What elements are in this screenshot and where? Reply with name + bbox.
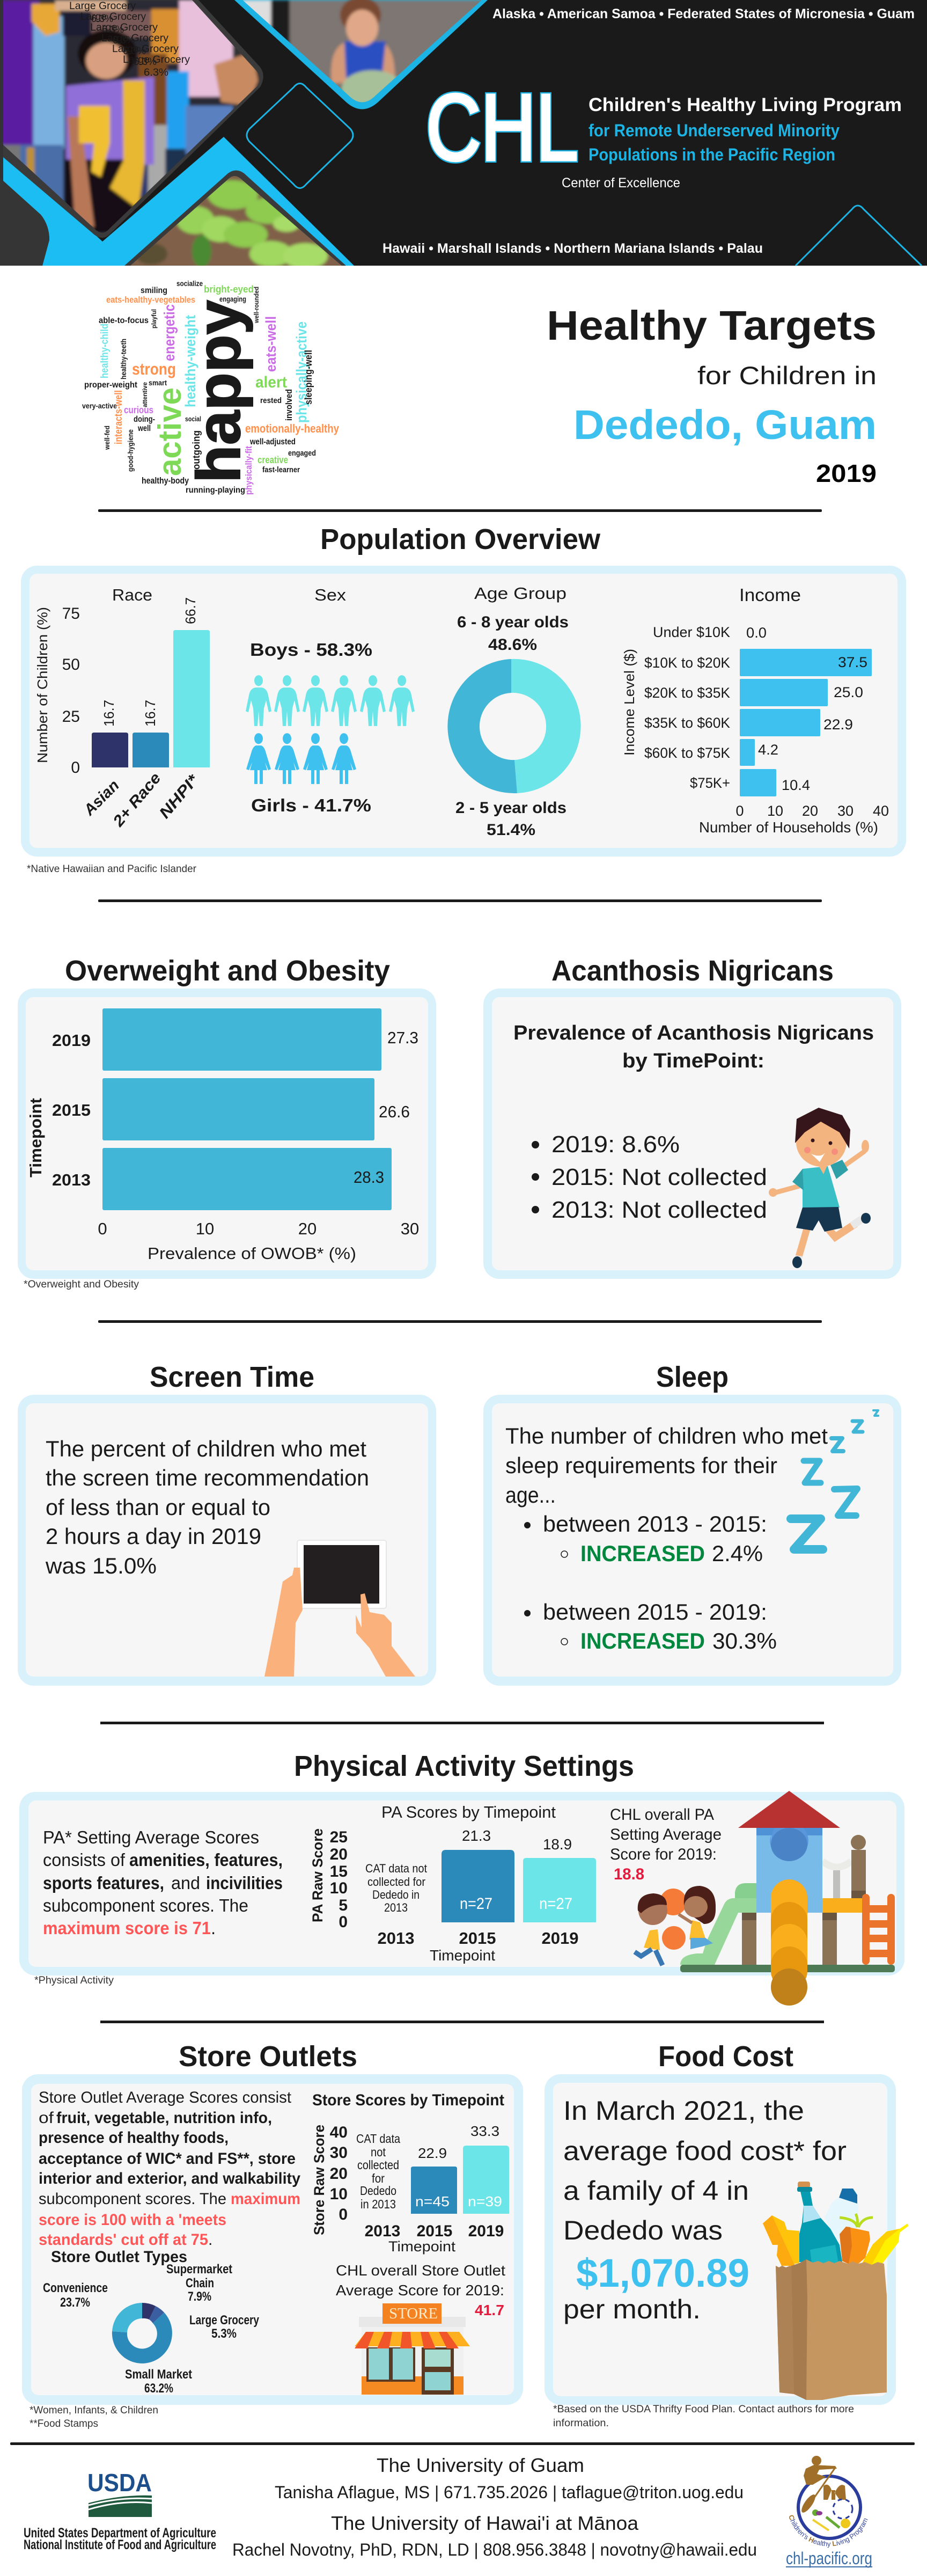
body text: Dededo was (563, 2215, 723, 2245)
chart: age group donut: 6 - 8 year olds (457, 613, 569, 631)
word cloud: active (152, 387, 188, 476)
chart: income: $75K+ (690, 775, 730, 791)
jurisdictions bottom: Hawaii • Marshall Islands • Northern Mariana Islands • Palau (382, 241, 763, 256)
chart: store scores by timepoint: Store Scores by Timepoint (312, 2091, 504, 2109)
word cloud: able-to-focus (99, 316, 149, 325)
chart: age group donut: 48.6% (488, 636, 537, 654)
chart: PA scores by timepoint: 21.3 (462, 1827, 491, 1844)
chart: income: 20 (802, 803, 818, 819)
CHL logo letters: CHL (426, 75, 578, 180)
chart: race: 50 (62, 656, 80, 674)
panel: population overview (21, 566, 906, 857)
overall PA score callout: Score for 2019: (610, 1846, 717, 1863)
icon: children with basketballs (635, 1886, 716, 1965)
body text: score is 100 with a 'meets (39, 2211, 226, 2229)
panel heading (513, 1022, 874, 1072)
word cloud: sleeping-well (303, 350, 314, 405)
word cloud: engaged (288, 449, 316, 458)
body text: and (171, 1873, 200, 1893)
chart: income: $60K to $75K (644, 745, 730, 761)
chart: race: Number of Children (%) (34, 607, 50, 763)
body text: maximum score is 71 (43, 1918, 211, 1938)
word cloud: happy (185, 300, 253, 483)
panel: overweight chart: 26.6 (379, 1102, 410, 1121)
word cloud: well-adjusted (249, 437, 296, 447)
panel: overweight chart: Timepoint (26, 1098, 45, 1177)
chart: income: 30 (837, 803, 854, 819)
body text: between 2015 - 2019: (543, 1599, 767, 1624)
chart: income: 25.0 (834, 684, 863, 700)
word cloud: well-fed (103, 426, 111, 450)
chart: age group donut: 2 - 5 year olds (455, 799, 566, 817)
icon: sleeping Z marks (791, 1410, 878, 1549)
chart: store scores by timepoint: not (371, 2145, 386, 2159)
contacts: Rachel Novotny, PhD, RDN, LD | 808.956.3848 | novotny@hawaii.edu (232, 2540, 757, 2559)
icon: tablet in hands (264, 1540, 415, 1677)
word cloud: doing- (134, 415, 155, 424)
heading: Screen Time: Screen Time (150, 1361, 314, 1393)
photo: children with leis (0, 0, 263, 241)
word cloud: eats-healthy-vegetables (106, 295, 195, 305)
chart: store outlet types donut (43, 2248, 260, 2396)
panel: overweight chart: 2015 (52, 1101, 91, 1119)
chart: store outlet types donut: Supermarket (166, 2262, 232, 2277)
body text: PA* Setting Average Scores (43, 1827, 259, 1847)
bullet list: 2013: Not collected (551, 1197, 767, 1223)
program subtitle (588, 121, 840, 164)
footnote: information. (553, 2418, 609, 2429)
stray chart labels: 6.3% (102, 24, 124, 35)
stray chart labels: Large Grocery (80, 11, 146, 23)
panel: overweight chart (18, 989, 436, 1279)
chart: PA scores by timepoint: PA Scores by Timepoint (381, 1803, 556, 1821)
chart: PA scores by timepoint: n=27 (539, 1895, 572, 1913)
word cloud (82, 279, 340, 495)
CHL program logo: Children's Healthy Living Program (789, 2515, 868, 2548)
blue ribbon (3, 137, 354, 266)
chart: income: 40 (873, 803, 889, 819)
stray chart labels: 6.3% (134, 56, 157, 68)
panel: overweight chart: 2019 (52, 1031, 91, 1050)
panel heading: Prevalence of Acanthosis Nigricans (513, 1022, 874, 1044)
chart: store scores by timepoint: 2013 (365, 2222, 400, 2240)
title line: for Children in: for Children in (697, 361, 877, 390)
body text (563, 2096, 847, 2324)
chart: PA scores by timepoint: n=27 (460, 1895, 492, 1913)
word cloud: creative (258, 455, 288, 465)
icon: store front: STORE (389, 2306, 438, 2322)
word cloud: well-rounded (253, 287, 260, 324)
word cloud: strong (132, 360, 176, 378)
chart: store scores by timepoint: Store Raw Score (311, 2125, 327, 2235)
body text: acceptance of WIC* and FS**, store (39, 2150, 296, 2168)
body text: In March 2021, the (563, 2096, 804, 2126)
body text: between 2013 - 2015: (543, 1511, 767, 1536)
body text: Store Outlet Average Scores consist (39, 2089, 292, 2106)
body text: presence of healthy foods, (39, 2129, 229, 2147)
word cloud: well (137, 424, 151, 433)
chart: sex: Girls - 41.7% (251, 795, 371, 815)
footnote: *Physical Activity (34, 1975, 114, 1986)
stray chart labels: 6.3% (123, 46, 146, 57)
word cloud: running-playing (186, 486, 245, 495)
word cloud: interacts-well (113, 390, 124, 444)
chart: PA scores by timepoint: 0 (339, 1913, 348, 1931)
footnotes (30, 2405, 158, 2429)
header banner (0, 0, 927, 269)
panel: acanthosis nigricans (483, 989, 901, 1279)
chart: income: 37.5 (838, 654, 867, 670)
stray chart labels: Large Grocery (123, 54, 190, 65)
chart: PA scores by timepoint: 2013 (378, 1929, 414, 1948)
chart: race: 66.7 (182, 597, 198, 624)
chart: race: 16.7 (101, 700, 117, 727)
chart: store scores by timepoint: 22.9 (418, 2145, 447, 2161)
grey corner shape (0, 177, 49, 266)
heading: Acanthosis Nigricans: Acanthosis Nigricans (551, 955, 834, 987)
title line: Dededo, Guam: Dededo, Guam (573, 402, 877, 448)
main title (547, 303, 877, 487)
body text: 2.4% (712, 1541, 763, 1566)
word cloud: involved (284, 389, 294, 421)
overall PA score callout: Setting Average (610, 1826, 722, 1843)
word cloud: healthy-child (99, 324, 111, 378)
chart: store scores by timepoint: Timepoint (388, 2238, 456, 2255)
panel: overweight chart: 20 (298, 1219, 317, 1238)
chart: store scores by timepoint: in 2013 (360, 2197, 396, 2211)
body text: maximum (231, 2190, 300, 2208)
word cloud: bright-eyed (204, 284, 254, 295)
heading: Overweight and Obesity: Overweight and Obesity (65, 955, 390, 987)
chart: store scores by timepoint: n=45 (415, 2193, 450, 2209)
program name: Children's Healthy Living Program (588, 94, 902, 115)
word cloud: smart (149, 378, 167, 387)
footnote: *Native Hawaiian and Pacific Islander (27, 863, 197, 875)
body text: . (208, 2231, 212, 2249)
chart: income: Under $10K (653, 624, 730, 640)
heading: Store Outlets: Store Outlets (179, 2040, 357, 2073)
chart: income: 10 (767, 803, 783, 819)
icon: boys row (246, 675, 415, 726)
chart: store outlet types donut: Small Market (125, 2367, 192, 2382)
word cloud: proper-weight (84, 380, 138, 390)
overall PA score callout: CHL overall PA (610, 1806, 714, 1824)
chart: store scores by timepoint: n=39 (468, 2193, 502, 2209)
chart: store scores by timepoint: CAT data (356, 2132, 400, 2146)
word cloud: engaging (219, 295, 246, 303)
chart: PA scores by timepoint: 2013 (384, 1901, 408, 1914)
stray chart labels: Large Grocery (69, 1, 136, 12)
word cloud: curious (124, 405, 153, 415)
bullet list: 2019: 8.6% (551, 1131, 680, 1158)
chart: race: 75 (62, 605, 80, 623)
body text (45, 1436, 369, 1578)
word cloud: energetic (161, 304, 178, 361)
chart: race: NHPI* (156, 771, 203, 822)
chart: store outlet types donut: Chain (186, 2276, 214, 2290)
chart: sex: Sex (314, 586, 347, 604)
heading: Food Cost: Food Cost (658, 2040, 793, 2073)
body text: amenities, features, (129, 1850, 283, 1870)
body text: average food cost* for (563, 2136, 847, 2166)
chart: PA scores by timepoint: collected for (367, 1875, 425, 1889)
body text: INCREASED (580, 1541, 705, 1566)
contacts: The University of Guam (377, 2454, 584, 2476)
body text: sleep requirements for their (505, 1453, 777, 1478)
stray chart labels: Large Grocery (101, 33, 169, 44)
footnotes: **Food Stamps (30, 2418, 98, 2429)
chart: PA scores by timepoint: Dededo in (372, 1888, 420, 1901)
stray chart labels (69, 1, 190, 78)
chart: store outlet types donut: 5.3% (211, 2326, 237, 2341)
panel: overweight chart: 27.3 (387, 1028, 418, 1047)
body text: The number of children who met (505, 1423, 828, 1448)
overall store score callout (336, 2262, 505, 2318)
panel: overweight chart: 28.3 (354, 1168, 384, 1187)
chart: income: 22.9 (823, 716, 853, 733)
body text: standards' cut off at 75 (39, 2231, 208, 2249)
chart: PA scores by timepoint: 18.9 (543, 1836, 572, 1853)
chart: store scores by timepoint: 30 (330, 2144, 348, 2162)
panel: overweight chart: 2013 (52, 1170, 91, 1189)
jurisdictions top: Alaska • American Samoa • Federated States of Micronesia • Guam (492, 6, 915, 21)
body text: interior and exterior, and walkability (39, 2170, 300, 2187)
CHL logo letters: CHL (426, 75, 578, 180)
icon: grocery bag (763, 2182, 908, 2400)
body text (43, 1827, 283, 1938)
word cloud: eats-well (263, 316, 279, 372)
word cloud: smiling (141, 286, 167, 295)
chart: store scores by timepoint: 0 (339, 2206, 348, 2223)
overall PA score callout (610, 1806, 722, 1883)
footnote (553, 2404, 854, 2429)
footer (24, 2454, 872, 2568)
word cloud: socialize (176, 279, 203, 288)
word cloud: physically-fit (244, 446, 254, 495)
body text: of (39, 2109, 54, 2127)
chart: store scores by timepoint: for (372, 2171, 385, 2185)
panel: overweight chart: 0 (98, 1219, 107, 1238)
contacts (232, 2454, 757, 2559)
word cloud: alert (255, 374, 287, 391)
title line: Healthy Targets: Healthy Targets (547, 303, 877, 349)
chart: store outlet types donut: 7.9% (188, 2289, 211, 2304)
word cloud: healthy-weight (182, 315, 198, 407)
word cloud: playful (150, 309, 158, 328)
chart: store scores by timepoint: 2019 (468, 2222, 504, 2240)
chart: sex (246, 586, 415, 815)
body text: 2 hours a day in 2019 (46, 1524, 261, 1549)
chart: PA scores by timepoint (310, 1803, 596, 1964)
word cloud: social (185, 415, 201, 423)
body text: the screen time recommendation (46, 1465, 369, 1490)
body text: of less than or equal to (46, 1495, 270, 1520)
heading: Physical Activity Settings: Physical Activity Settings (294, 1750, 634, 1782)
word cloud: attentive (141, 382, 149, 407)
panel: sleep (483, 1395, 901, 1686)
body text: sports features, (43, 1873, 164, 1893)
panel: overweight chart: Prevalence of OWOB* (%) (148, 1244, 356, 1263)
overall store score callout: CHL overall Store Outlet (336, 2262, 505, 2279)
icon: girls row (246, 733, 356, 784)
photo: smiling child (234, 0, 494, 113)
panel heading: by TimePoint: (622, 1050, 764, 1072)
chart: income: 4.2 (758, 742, 778, 758)
panel: food cost (545, 2074, 908, 2405)
body text: . (211, 1918, 216, 1938)
body text: incivilities (206, 1873, 283, 1893)
chart: store outlet types donut: 63.2% (144, 2381, 173, 2396)
icon: playground (680, 1791, 895, 2006)
title line: year: 2019 (816, 459, 877, 487)
chart: age group donut: Age Group (474, 584, 566, 603)
word cloud: very-active (82, 401, 117, 410)
word cloud: good-hygiene (126, 429, 135, 472)
word cloud: emotionally-healthy (245, 422, 340, 435)
chart: age group donut: 51.4% (487, 821, 535, 839)
body text (505, 1423, 828, 1653)
food cost value: $1,070.89 (576, 2251, 749, 2295)
body text: consists of (43, 1850, 126, 1870)
word cloud: physically-active (293, 321, 310, 423)
overall store score callout: Average Score for 2019: (336, 2282, 504, 2299)
chart: race (34, 586, 210, 830)
chart: income: Number of Households (%) (699, 819, 878, 836)
chart: income (621, 585, 889, 836)
chart: income: 10.4 (782, 777, 810, 793)
word cloud: outgoing (191, 430, 202, 470)
overall store score callout: 41.7 (475, 2302, 504, 2318)
CHL program logo (789, 2456, 868, 2548)
overall PA score callout: 18.8 (614, 1865, 644, 1883)
chart: race: 16.7 (142, 700, 158, 727)
stray chart labels: 6.3% (91, 13, 113, 25)
chart: store outlet types donut: Convenience (43, 2281, 108, 2295)
panel: store outlets (22, 2074, 523, 2405)
chart: store scores by timepoint: 40 (330, 2124, 348, 2141)
chart: store outlet types donut: 23.7% (60, 2295, 90, 2310)
stray chart labels: 6.3% (113, 35, 135, 46)
chart: income: 0.0 (746, 625, 767, 641)
bullet list: 2015: Not collected (551, 1164, 767, 1190)
chart: PA scores by timepoint: 2019 (542, 1929, 578, 1948)
chart: store outlet types donut: Large Grocery (189, 2313, 260, 2328)
icon: store front (355, 2303, 470, 2395)
body text: per month. (563, 2294, 701, 2324)
chart: race: 25 (62, 708, 80, 726)
chart: income: $10K to $20K (644, 655, 730, 671)
USDA agency name (24, 2526, 216, 2552)
chart: sex: Boys - 58.3% (250, 640, 372, 660)
chart: age group donut (447, 584, 581, 839)
word cloud: healthy-teeth (119, 339, 128, 379)
chart: PA scores by timepoint: 15 (330, 1863, 348, 1880)
chart: income: 0 (735, 803, 744, 819)
chart: store scores by timepoint: 2015 (417, 2222, 452, 2240)
chart: store scores by timepoint: Dededo (360, 2184, 396, 2198)
body text: subcomponent scores. The (39, 2190, 226, 2208)
body text: age... (505, 1482, 556, 1507)
chart: income: $35K to $60K (644, 715, 730, 731)
heading: Population Overview: Population Overview (320, 523, 601, 555)
body text: a family of 4 in (563, 2176, 749, 2206)
panel: physical activity settings (19, 1791, 904, 2006)
panel: overweight chart: 10 (196, 1219, 214, 1238)
panel: screen time (18, 1395, 436, 1686)
contacts: The University of Hawai'i at Mānoa (331, 2512, 639, 2534)
bullet list (532, 1131, 767, 1223)
chart: race: Race (112, 586, 152, 604)
chart: income: Income Level ($) (621, 649, 637, 756)
chart: income: $20K to $35K (644, 685, 730, 701)
stray chart labels: Large Grocery (90, 22, 158, 33)
body text: fruit, vegetable, nutrition info, (56, 2109, 272, 2127)
chart: store scores by timepoint (311, 2091, 509, 2255)
word cloud: fast-learner (262, 465, 300, 474)
chart: store outlet types donut: Store Outlet Types (51, 2248, 187, 2266)
chart: store scores by timepoint: 10 (330, 2185, 348, 2203)
program subtitle: Populations in the Pacific Region (588, 145, 835, 164)
chart: store scores by timepoint: collected (357, 2158, 399, 2172)
chart: store scores by timepoint: 33.3 (470, 2123, 499, 2139)
chart: PA scores by timepoint: 25 (330, 1828, 348, 1846)
chart: race: Asian (80, 777, 123, 819)
website link: chl-pacific.org (786, 2549, 872, 2568)
chart: PA scores by timepoint: CAT data not (365, 1862, 427, 1875)
body text: subcomponent scores. The (43, 1896, 248, 1915)
footnotes: *Women, Infants, & Children (30, 2405, 158, 2416)
USDA logo: USDA (87, 2469, 152, 2497)
USDA agency name: National Institute of Food and Agriculture (24, 2537, 216, 2552)
photo: lettuce garden (124, 171, 346, 266)
chart: PA scores by timepoint: 2015 (459, 1929, 496, 1948)
USDA logo (87, 2469, 152, 2517)
word cloud: healthy-body (142, 475, 189, 486)
body text: was 15.0% (45, 1553, 157, 1578)
chart: race: 2+ Race (109, 770, 164, 830)
footnote: *Based on the USDA Thrifty Food Plan. Contact authors for more (553, 2404, 854, 2415)
chart: store scores by timepoint: 20 (330, 2165, 348, 2183)
outline diamond (247, 84, 353, 188)
chart: PA scores by timepoint: 20 (330, 1846, 348, 1863)
program subtitle: for Remote Underserved Minority (588, 121, 840, 140)
chart: PA scores by timepoint: PA Raw Score (310, 1828, 326, 1922)
body text (39, 2089, 300, 2249)
body text: The percent of children who met (46, 1436, 366, 1461)
chart: PA scores by timepoint: 5 (339, 1897, 348, 1914)
outline triangle (796, 206, 922, 266)
chart: PA scores by timepoint: 10 (330, 1879, 348, 1897)
chart: PA scores by timepoint: Timepoint (430, 1947, 495, 1964)
heading: Sleep: Sleep (656, 1361, 729, 1393)
body text: 30.3% (712, 1628, 777, 1653)
chart: race: 0 (71, 759, 80, 777)
chart: income: Income (739, 585, 801, 605)
stray chart labels: 6.3% (144, 67, 168, 78)
icon: running boy (769, 1108, 871, 1268)
USDA agency name: United States Department of Agriculture (24, 2526, 216, 2541)
center of excellence: Center of Excellence (562, 175, 680, 191)
panel: overweight chart: 30 (401, 1219, 419, 1238)
footnote: *Overweight and Obesity (24, 1279, 139, 1290)
contacts: Tanisha Aflague, MS | 671.735.2026 | taflague@triton.uog.edu (275, 2483, 744, 2502)
stray chart labels: Large Grocery (112, 43, 179, 55)
word cloud: rested (260, 396, 282, 405)
body text: INCREASED (580, 1628, 705, 1653)
